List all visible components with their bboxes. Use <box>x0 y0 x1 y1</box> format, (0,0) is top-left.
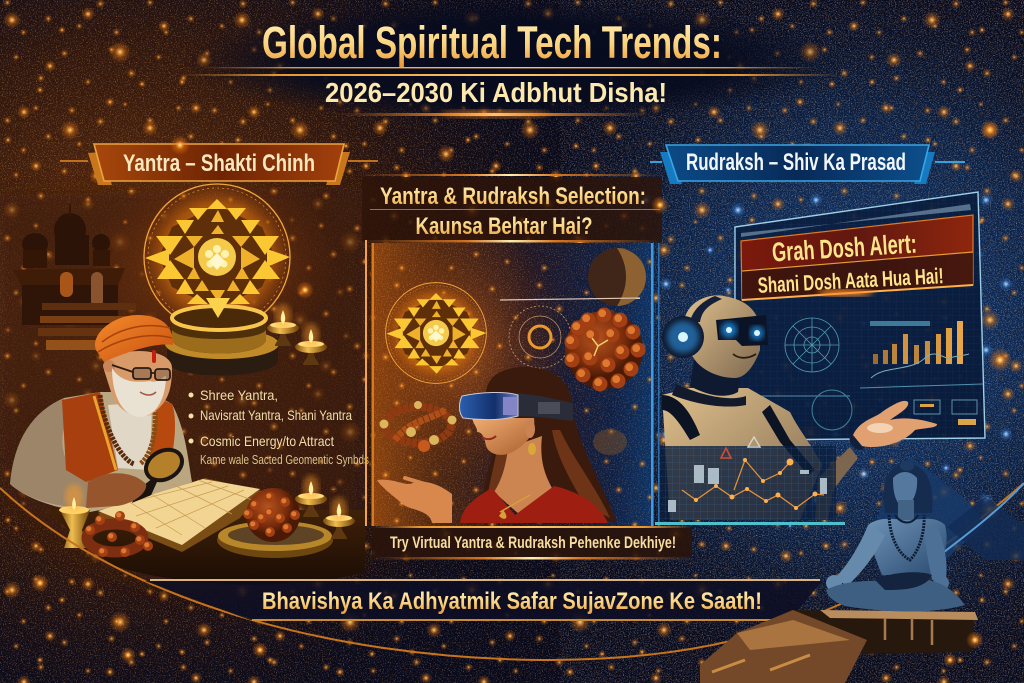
icon: virtual yantra hologram <box>384 281 488 385</box>
foreground glints <box>31 121 1012 667</box>
alert: grah dosh: Shani Dosh Aata Hua Hai! <box>757 263 944 298</box>
heading: yantra and rudraksh selection: Kaunsa Behtar Hai? <box>416 213 592 240</box>
banner: try virtual: Try Virtual Yantra & Rudraksh Pehenke Dekhiye! <box>390 533 676 552</box>
text block: yantra list: Kame wale Sacted Geomentic Synbds <box>200 453 369 467</box>
icon: planet <box>588 248 646 306</box>
chart: bar chart on screen <box>870 321 969 378</box>
banner: Yantra – Shakti Chinh: Yantra – Shakti Chinh <box>123 150 315 177</box>
table <box>45 510 365 585</box>
figure: meditating Shiva <box>826 461 965 612</box>
title divider <box>180 67 840 76</box>
icon: open hand <box>377 478 452 523</box>
subtitle: 2026–2030 Ki Adbhut Disha! <box>325 77 667 108</box>
panel: virtual try-on <box>350 220 660 526</box>
icon: large rudraksha <box>564 308 646 392</box>
figure: sage with magnifier <box>10 315 192 512</box>
banner: try virtual <box>372 526 692 560</box>
icon: brass lamp left <box>59 484 90 548</box>
text block: yantra list: Shree Yantra, <box>200 387 278 403</box>
footer arc <box>0 483 1024 660</box>
banner: Yantra – Shakti Chinh <box>60 144 378 185</box>
figure: woman with VR headset <box>460 367 617 523</box>
banner: Rudraksh – Shiv Ka Prasad <box>650 145 965 184</box>
icon: temple silhouette <box>13 204 136 350</box>
icon: shree yantra on pedestal <box>141 181 293 376</box>
title: Global Spiritual Tech Trends: <box>262 17 722 68</box>
banner: Rudraksh – Shiv Ka Prasad: Rudraksh – Shiv Ka Prasad <box>686 149 906 176</box>
icon: lamps on table right <box>295 475 355 539</box>
heading: yantra and rudraksh selection: Yantra & Rudraksh Selection: <box>380 183 646 210</box>
icon: rock ledge <box>700 610 978 683</box>
banner: Bhavishya tagline: Bhavishya Ka Adhyatmik Safar SujavZone Ke Saath! <box>262 588 762 615</box>
text block: yantra list: Navisratt Yantra, Shani Yantra <box>200 407 352 423</box>
alert: grah dosh <box>741 215 973 300</box>
text block: yantra list: Cosmic Energy/to Attract <box>200 433 334 449</box>
icon: rudraksha on gold plate <box>217 488 333 558</box>
panel: left yantra section background <box>0 160 366 591</box>
figure: robot <box>662 295 937 520</box>
icon: mountains <box>870 457 1024 565</box>
chart: holographic line graph <box>655 437 845 525</box>
icon: magnifier and hand <box>86 444 187 508</box>
banner: Bhavishya tagline <box>145 579 822 621</box>
alert: grah dosh: Grah Dosh Alert: <box>771 228 918 268</box>
icon: rudraksha bead mala on table <box>85 511 153 557</box>
icon: faint small rudraksha <box>593 429 627 455</box>
heading: yantra and rudraksh selection <box>360 174 662 242</box>
icon: rudraksha mala <box>380 401 456 452</box>
icon: mandala hologram <box>500 298 640 368</box>
panel: lower dashboard widgets <box>735 384 983 430</box>
icon: oil lamps near yantra <box>267 304 327 365</box>
text block: yantra list <box>188 387 369 467</box>
icon: open chart book <box>98 478 262 552</box>
panel: holographic screen <box>735 192 985 440</box>
icon: astrology chart on screen <box>785 318 839 372</box>
